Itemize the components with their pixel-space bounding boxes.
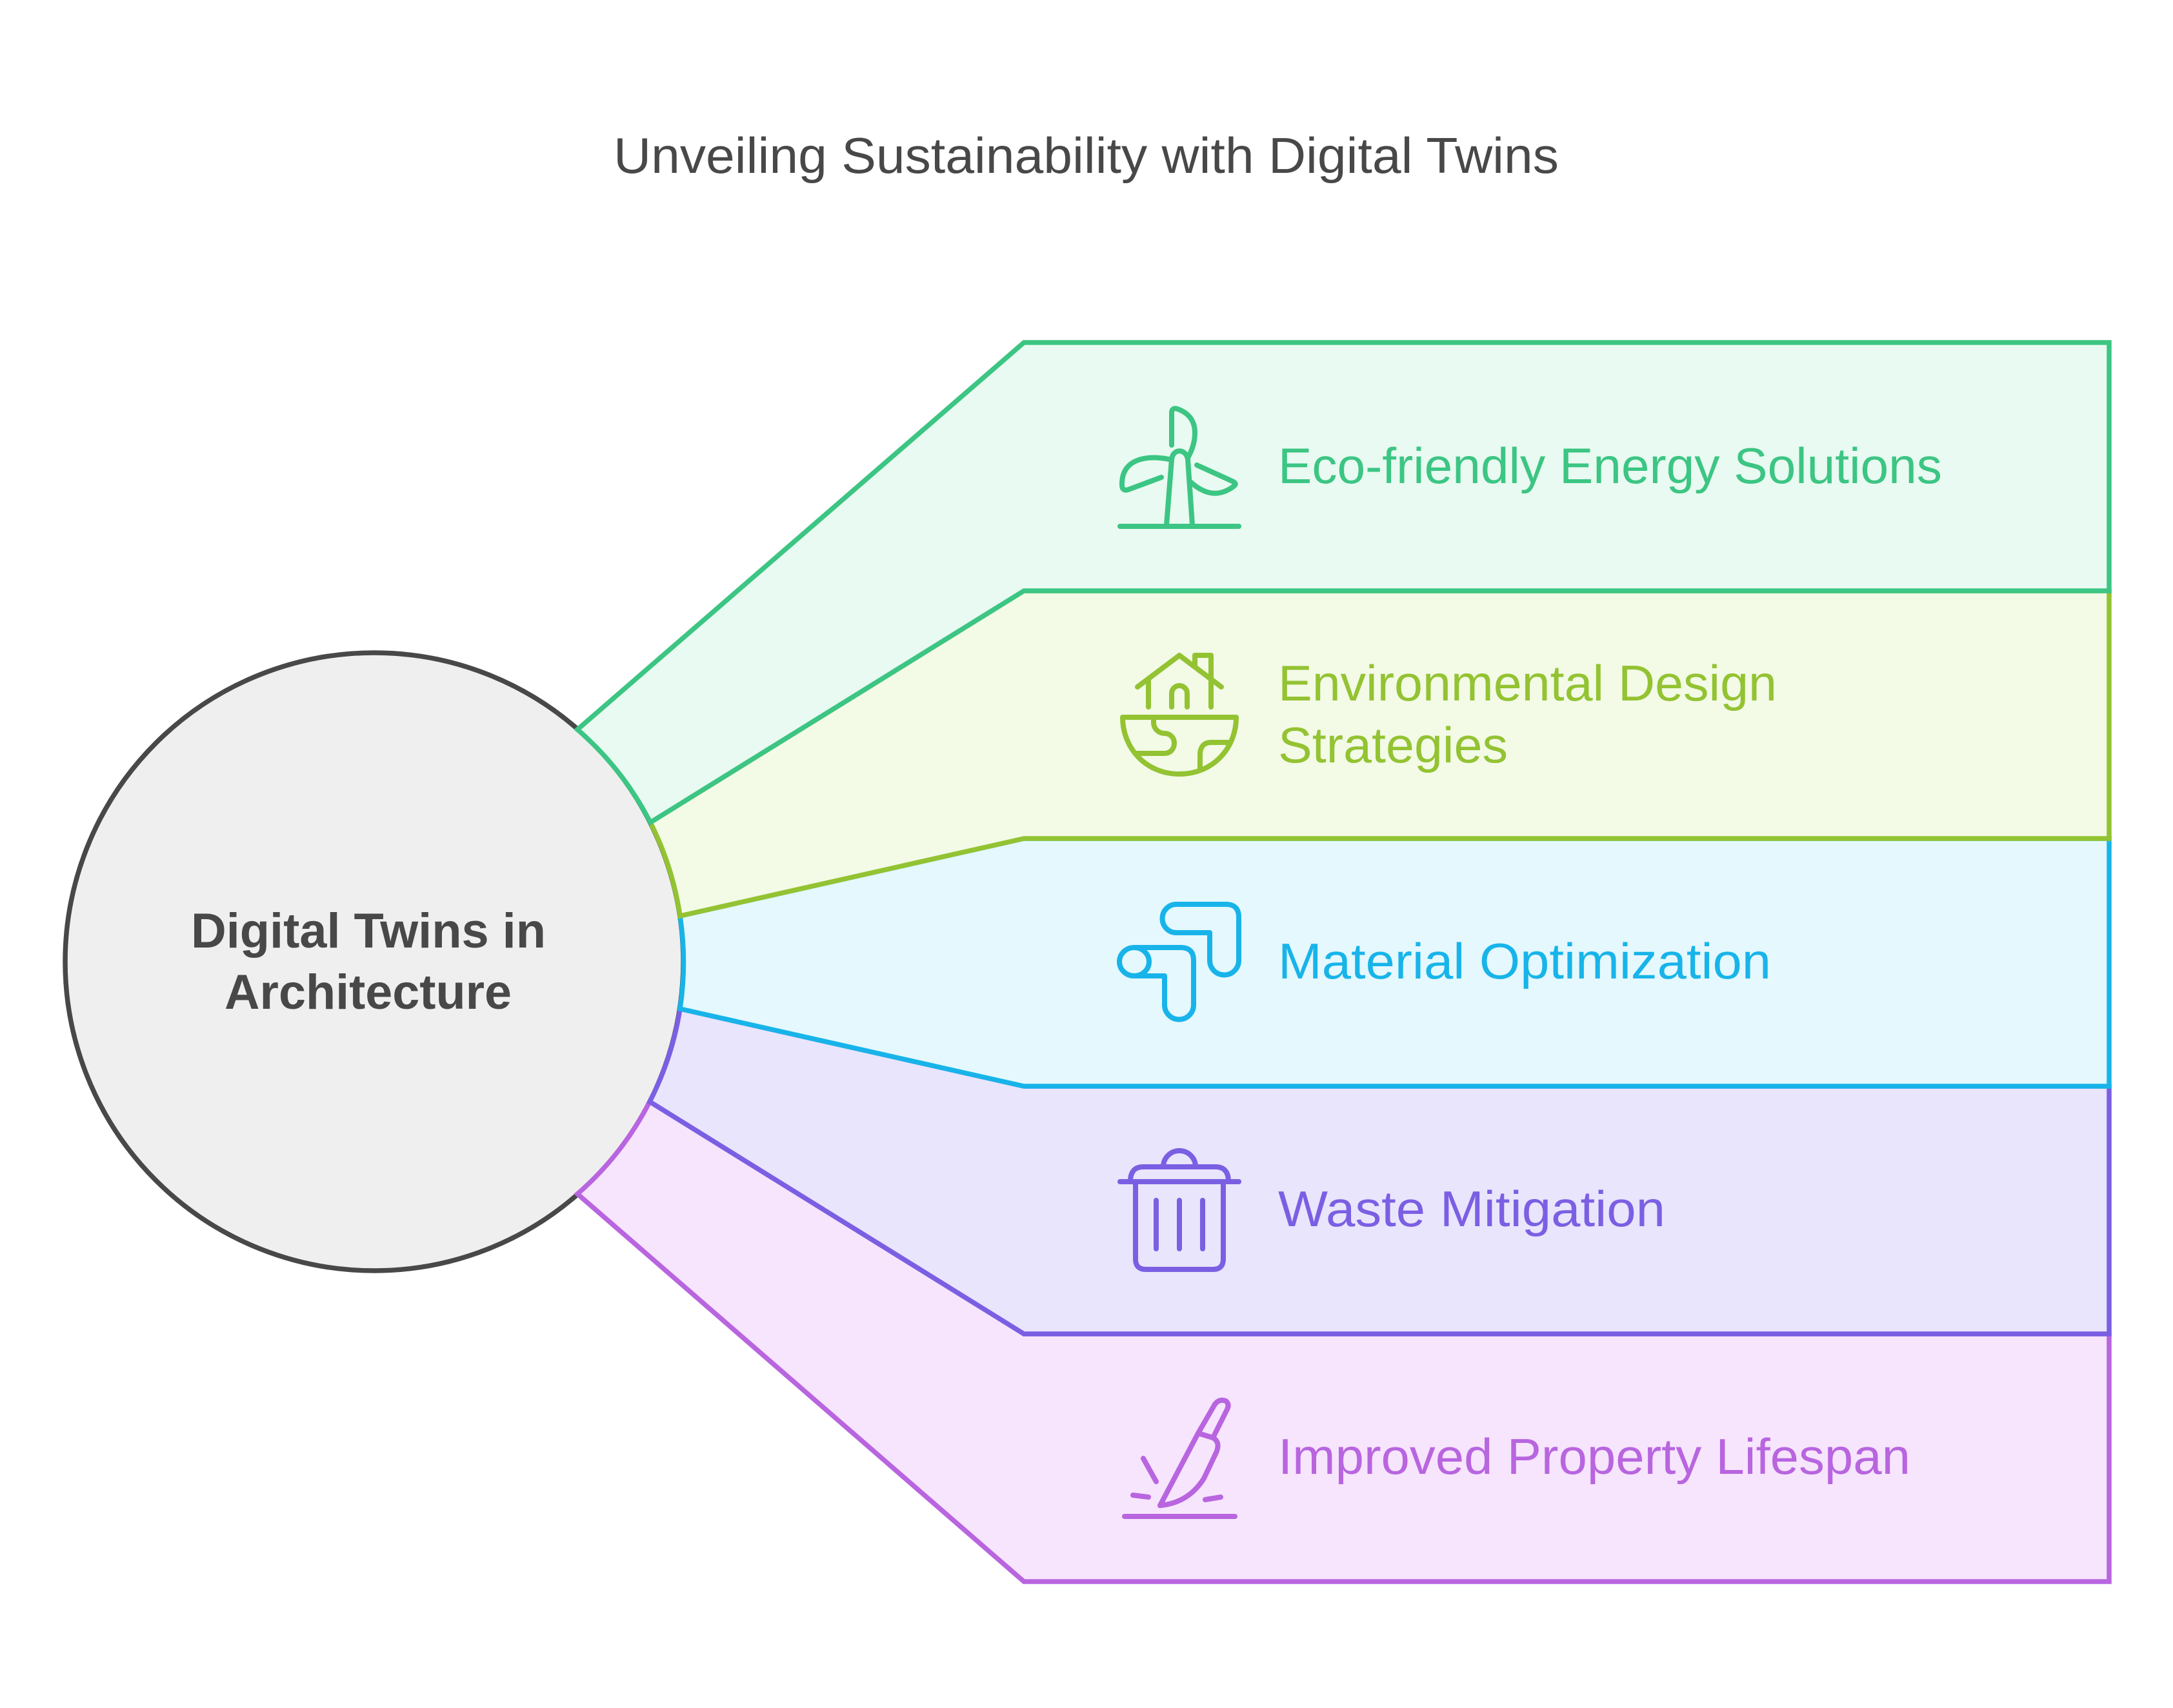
- circle label: Architecture: [225, 965, 512, 1020]
- icon: house on globe: [1123, 655, 1236, 774]
- panel: improved property lifespan: [577, 1102, 2109, 1582]
- central circle: [65, 653, 683, 1271]
- icon: pipes: [1119, 904, 1239, 1019]
- label: material optimization: Material Optimization: [1278, 933, 1771, 989]
- label: environmental design strategies: Environmental Design: [1278, 655, 1777, 711]
- icon: knife: [1125, 1400, 1235, 1516]
- label: improved property lifespan: Improved Property Lifespan: [1278, 1428, 1910, 1485]
- panel: waste mitigation: [650, 1009, 2109, 1334]
- label: eco-friendly energy solutions: Eco-friendly Energy Solutions: [1278, 437, 1942, 494]
- circle label: [191, 904, 546, 1020]
- title: Unveiling Sustainability with Digital Twins: [614, 127, 1559, 184]
- label: environmental design strategies: Strategies: [1278, 717, 1508, 773]
- icon: wind turbine: [1120, 408, 1239, 526]
- circle label: Digital Twins in: [191, 904, 546, 958]
- panel: environmental design strategies: [650, 591, 2109, 916]
- panel: eco-friendly energy solutions: [577, 343, 2109, 822]
- icon: trash bin: [1120, 1151, 1239, 1269]
- label: environmental design strategies: [1278, 655, 1777, 773]
- label: waste mitigation: Waste Mitigation: [1278, 1180, 1665, 1237]
- panel: material optimization: [680, 839, 2109, 1086]
